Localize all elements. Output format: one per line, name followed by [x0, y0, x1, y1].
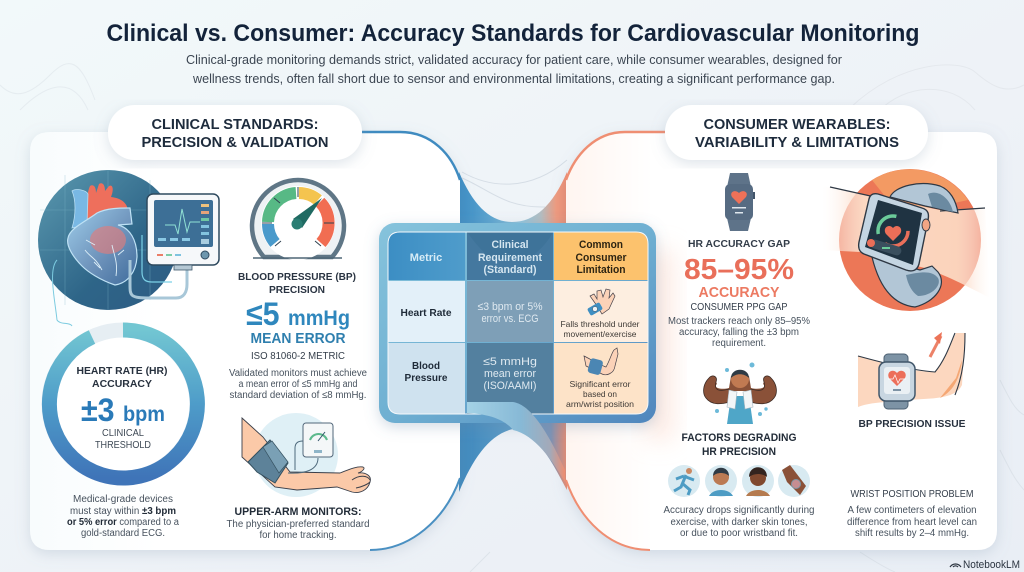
text: upper-arm monitors [226, 506, 370, 541]
table row: blood pressure: based on [583, 389, 617, 399]
chart: heart rate accuracy ring: HEART RATE (HR) [76, 365, 168, 377]
stat: heart rate accuracy gap: ACCURACY [698, 284, 780, 301]
text: degrading factors description: or due to poor wristband fit. [680, 528, 798, 539]
subtitle [186, 53, 842, 86]
table row: heart rate [388, 281, 648, 342]
table header row: Limitation [576, 264, 626, 276]
panel heading: clinical standards: CLINICAL STANDARDS: [152, 117, 318, 133]
text: degrading factors description: Accuracy drops significantly during [664, 505, 814, 516]
stat: blood pressure precision: a mean error of ≤5 mmHg and [238, 379, 358, 390]
stat: blood pressure precision: ISO 81060-2 METRIC [251, 351, 345, 362]
chart: heart rate accuracy ring: CLINICAL [102, 428, 144, 439]
icon: arm with cuff [584, 348, 618, 376]
table row: blood pressure [388, 343, 648, 414]
stat: heart rate accuracy gap: requirement. [712, 338, 766, 349]
text: BP precision issue: BP PRECISION ISSUE [858, 418, 966, 430]
text: wrist position problem: shift results by 2–4 mmHg. [855, 528, 969, 539]
table header row: Metric [410, 252, 442, 264]
subtitle: wellness trends, often fall short due to sensor and environmental limitations, creating a significant performance gap. [192, 72, 835, 86]
panel heading: consumer wearables: CONSUMER WEARABLES: [704, 117, 890, 133]
icons: degrading factors [668, 465, 810, 497]
table row: blood pressure: ≤5 mmHg [483, 356, 537, 368]
table row: blood pressure: Significant error [570, 379, 631, 389]
text: heart rate description: or 5% error compared to a [67, 517, 179, 528]
table header row: (Standard) [484, 264, 537, 276]
table row: blood pressure: (ISO/AAMI) [484, 380, 536, 392]
table row: blood pressure: mean error [484, 368, 536, 380]
table row: blood pressure: Pressure [404, 372, 448, 384]
table header row: Clinical [492, 239, 528, 251]
panel: clinical standards [30, 105, 460, 550]
panel heading: clinical standards: PRECISION & VALIDATION [142, 135, 328, 151]
text: upper-arm monitors: The physician-preferred standard [226, 519, 370, 530]
comparison table [379, 223, 656, 482]
stat: blood pressure precision: MEAN ERROR [250, 331, 346, 347]
table header row: Requirement [478, 252, 542, 264]
chart: heart rate accuracy ring: THRESHOLD [95, 440, 151, 451]
icon: blood pressure gauge [252, 180, 344, 260]
table header row: Consumer [576, 252, 627, 264]
panel heading: consumer wearables: VARIABILITY & LIMITATIONS [695, 135, 899, 151]
panel heading: consumer wearables [665, 105, 928, 160]
table row: blood pressure: Blood [412, 360, 440, 372]
stat: blood pressure precision [229, 271, 367, 401]
panel: consumer wearables [566, 105, 997, 550]
panel heading: clinical standards [108, 105, 362, 160]
title: Clinical vs. Consumer: Accuracy Standards for Cardiovascular Monitoring [106, 20, 920, 47]
text: wrist position problem: difference from heart level can [847, 517, 977, 528]
chart: heart rate accuracy ring: ACCURACY [92, 378, 152, 390]
center flow connector [459, 160, 567, 492]
text: degrading factors description [664, 505, 814, 539]
stat: heart rate accuracy gap [668, 238, 810, 349]
table row: blood pressure: arm/wrist position [566, 399, 634, 409]
heading: factors degrading HR precision: HR PRECISION [702, 446, 776, 458]
table header row [388, 232, 648, 280]
chart: heart rate accuracy ring [49, 330, 197, 478]
icon: smartwatch heart [725, 173, 755, 231]
table row: heart rate: ≤3 bpm or 5% [478, 301, 543, 313]
text: heart rate description [67, 494, 179, 539]
table row: heart rate: error vs. ECG [482, 313, 538, 325]
heading: factors degrading HR precision [682, 432, 796, 458]
text: upper-arm monitors: for home tracking. [260, 530, 336, 541]
illustration: upper-arm monitor [242, 413, 370, 497]
stat: blood pressure precision: standard deviation of ≤8 mmHg. [230, 390, 366, 401]
text: upper-arm monitors: UPPER-ARM MONITORS: [234, 506, 362, 518]
text: degrading factors description: exercise, with darker skin tones, [670, 517, 808, 528]
stat: heart rate accuracy gap: 85–95% [684, 254, 794, 286]
logo: NotebookLM: NotebookLM [963, 559, 1020, 571]
illustration: watch on wrist [822, 169, 990, 311]
text: wrist position problem: WRIST POSITION PROBLEM [850, 489, 974, 500]
text: wrist position problem: A few contimeters of elevation [848, 505, 976, 516]
text: heart rate description: gold-standard ECG. [81, 528, 165, 539]
illustration: athlete sweating [704, 362, 776, 424]
icon: shaking wrist [587, 289, 615, 316]
table row: heart rate: Heart Rate [400, 307, 452, 319]
stat: heart rate accuracy gap: accuracy, falling the ±3 bpm [679, 327, 799, 338]
table header row: Common [579, 239, 623, 251]
stat: heart rate accuracy gap: CONSUMER PPG GAP [690, 302, 788, 313]
stat: blood pressure precision: BLOOD PRESSURE (BP) [238, 271, 356, 283]
stat: blood pressure precision: PRECISION [269, 284, 325, 296]
stat: heart rate accuracy gap: Most trackers reach only 85–95% [668, 316, 810, 327]
text: wrist position problem [847, 489, 977, 539]
text: heart rate description: Medical-grade devices [73, 494, 173, 505]
heading: factors degrading HR precision: FACTORS DEGRADING [682, 432, 796, 444]
stat: heart rate accuracy gap: HR ACCURACY GAP [688, 238, 790, 250]
stat: blood pressure precision: ≤5 mmHg [246, 296, 350, 332]
illustration: heart and monitor [38, 170, 219, 326]
subtitle: Clinical-grade monitoring demands strict, validated accuracy for patient care, while consumer wearables, designed for [186, 53, 842, 67]
stat: blood pressure precision: Validated monitors must achieve [229, 368, 367, 379]
table row: heart rate: movement/exercise [564, 329, 637, 339]
illustration: raised arm with watch [858, 332, 965, 409]
text: heart rate description: must stay within ±3 bpm [70, 506, 176, 517]
table row: heart rate: Falls threshold under [560, 319, 640, 329]
chart: heart rate accuracy ring: ±3 bpm [81, 392, 165, 428]
